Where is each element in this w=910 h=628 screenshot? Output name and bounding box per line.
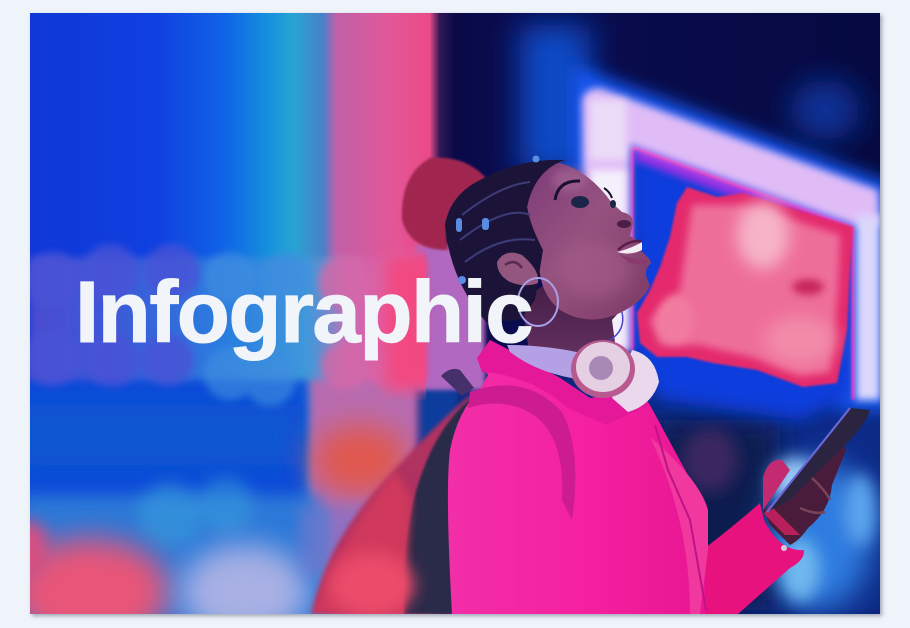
hoop earring bbox=[518, 278, 558, 326]
bokeh band behind title bbox=[30, 258, 426, 380]
bottom bokeh bbox=[20, 495, 320, 625]
hand and phone bbox=[763, 408, 870, 551]
lower blue field bbox=[30, 376, 312, 506]
sleeve bbox=[705, 503, 804, 614]
face bbox=[527, 163, 651, 320]
neon blurred lettering bbox=[637, 187, 853, 387]
jacket bbox=[448, 340, 804, 614]
woman bbox=[312, 156, 870, 617]
strap bbox=[468, 385, 575, 520]
hair and bun bbox=[402, 156, 565, 322]
lilac behind head bbox=[415, 245, 485, 390]
ear bbox=[497, 253, 538, 285]
backpack bbox=[312, 369, 480, 617]
collar bbox=[477, 340, 650, 425]
right bottom light bbox=[768, 460, 872, 610]
pink column under the title bbox=[310, 370, 418, 510]
headphones bbox=[507, 340, 659, 412]
neon sign frame bbox=[582, 88, 880, 420]
neck bbox=[524, 286, 618, 380]
title: Infographic bbox=[75, 264, 532, 361]
